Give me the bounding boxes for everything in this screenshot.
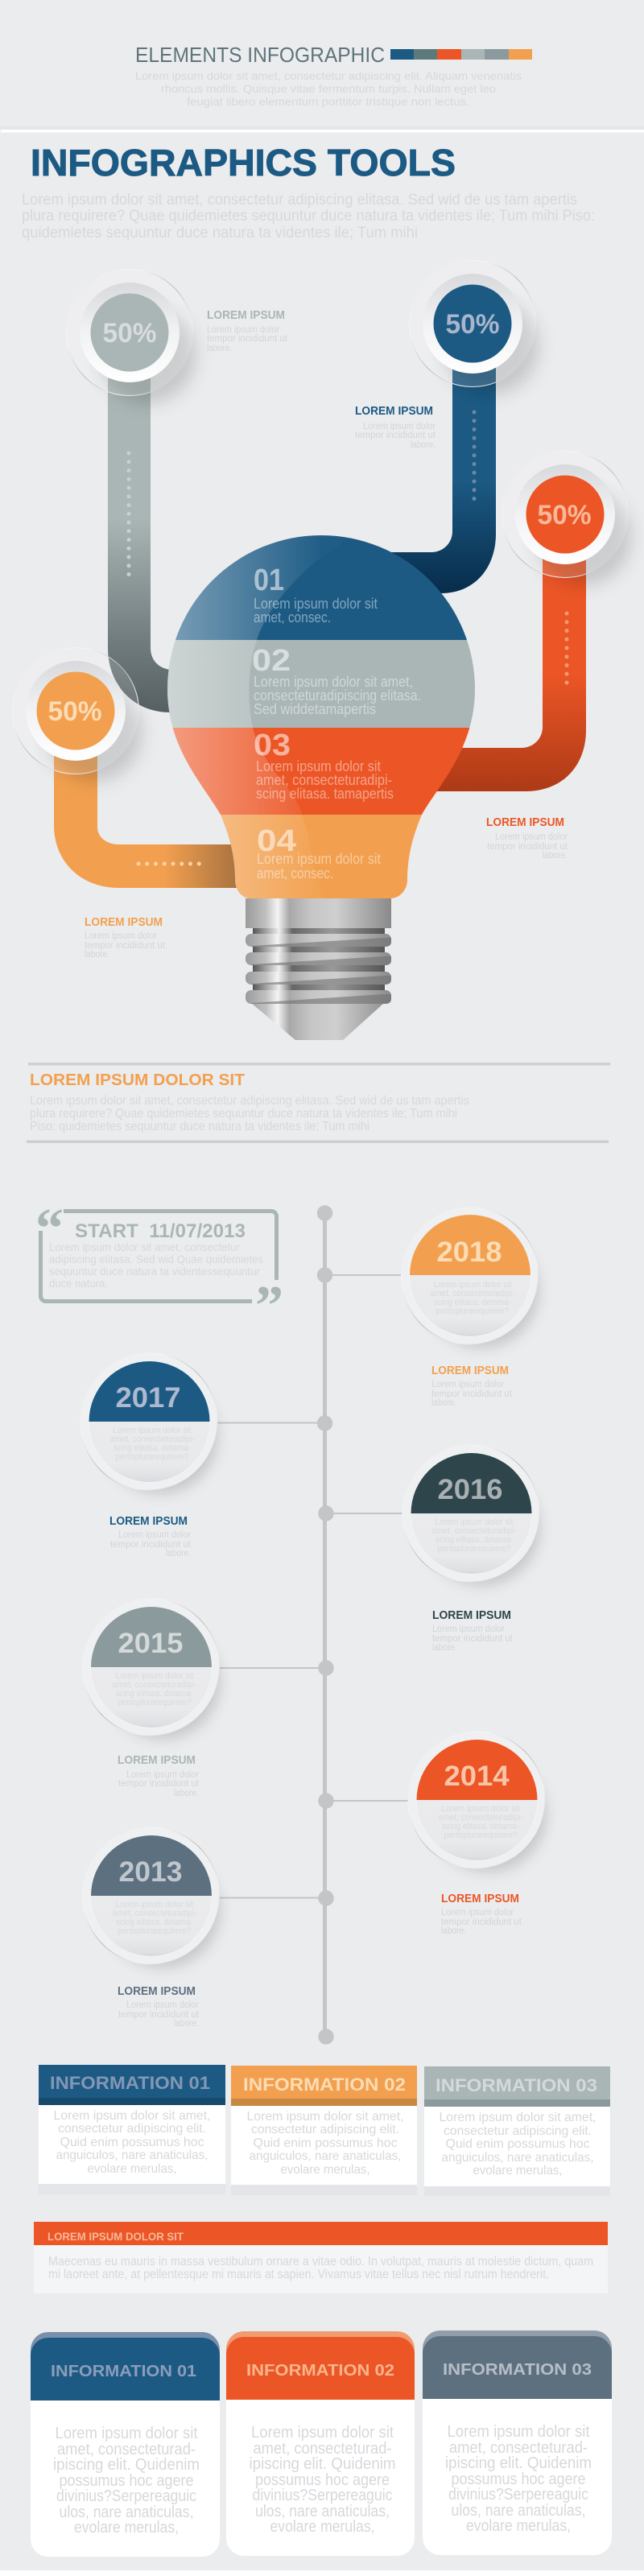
year circle 2013: 2013 (119, 1856, 182, 1888)
bottom card 01 (31, 2332, 220, 2557)
header divider (0, 126, 644, 132)
bottom card 02 (226, 2331, 415, 2556)
info box 01: Quid enim possumus hoc (60, 2136, 204, 2149)
info box 01: anguiculos, nare anaticulas, (56, 2149, 208, 2162)
label: blue (355, 405, 436, 450)
info box 01: consectetur adipiscing elit. (58, 2122, 206, 2136)
label 2013 (118, 1985, 200, 2029)
bottom card 03: evolare merulas, (466, 2517, 571, 2535)
bottom card 03: INFORMATION 03 (443, 2361, 592, 2379)
start description: Lorem ipsum dolor sit amet, consectetur (49, 1241, 240, 1253)
year circle 2013 (82, 1827, 221, 1968)
badge: yellow 50%: 50% (48, 696, 101, 727)
info box 01: evolare merulas, (87, 2162, 177, 2176)
year circle 2015: 2015 (118, 1628, 184, 1659)
quote frame (40, 1211, 277, 1301)
summary paragraph: Lorem ipsum dolor sit amet, consectetur adipiscing elitasa. Sed wid de us tam apertis (30, 1094, 469, 1108)
badge: orange 50% (502, 451, 631, 585)
year circle 2016: pertisplurarequirere? (438, 1544, 510, 1554)
label: grey: tempor incididunt ut (207, 334, 288, 344)
year circle 2015: amet, consecteturadipi- (113, 1680, 197, 1690)
badge: grey 50%: 50% (103, 318, 156, 349)
section 02 text: 02 (252, 644, 291, 678)
info box 02: evolare merulas, (280, 2163, 370, 2177)
year circle 2018: amet, consecteturadipi- (430, 1289, 515, 1298)
colour swatch bar (390, 49, 532, 60)
label 2014: labore. (441, 1926, 466, 1936)
year circle 2018: scing elitasa. detama- (434, 1298, 511, 1307)
year circle 2014: 2014 (444, 1761, 510, 1792)
header title: ELEMENTS INFOGRAPHIC (135, 43, 385, 67)
section 04 text: 04 (257, 824, 296, 858)
bottom card 01: INFORMATION 01 (51, 2363, 196, 2380)
section 01 text (254, 564, 378, 625)
intro paragraph: quidemietes sequuntur duce natura ta videntes ile; Tum mihi (22, 225, 418, 242)
year circle 2017: 2017 (116, 1382, 180, 1414)
section 03 text: amet, consecteturadipi- (256, 772, 392, 788)
label 2015: LOREM IPSUM (118, 1754, 196, 1767)
year circle 2014: Lorem ipsum dolor sit (441, 1804, 520, 1814)
intro paragraph: plura requirere? Quae quidemietes sequuntur duce natura ta videntes ile; Tum mihi Piso: (22, 208, 595, 225)
label: yellow: LOREM IPSUM (85, 916, 163, 929)
label: orange: Lorem ipsum dolor (495, 832, 568, 842)
badge: orange 50%: 50% (538, 500, 591, 530)
bottom card 03: possumus hoc agere (451, 2471, 586, 2488)
year circle 2017: Lorem ipsum dolor sit (113, 1426, 192, 1435)
year circle 2013: scing elitasa. detama- (116, 1918, 193, 1927)
year circle 2015: scing elitasa. detama- (116, 1689, 193, 1699)
info box 02: Lorem ipsum dolor sit amet, (246, 2110, 404, 2124)
label 2015 (118, 1754, 200, 1798)
badge: blue 50%: 50% (446, 309, 499, 340)
year circle 2017: amet, consecteturadipi- (109, 1435, 195, 1444)
info box 03: anguiculos, nare anaticulas, (441, 2151, 594, 2165)
info box 01: INFORMATION 01 (50, 2073, 210, 2093)
bottom card 02: INFORMATION 02 (246, 2362, 394, 2380)
section 03 text: Lorem ipsum dolor sit (256, 758, 381, 774)
label 2016: labore. (432, 1643, 457, 1653)
year circle 2016: Lorem ipsum dolor sit (435, 1517, 514, 1527)
main title: INFOGRAPHICS TOOLS (31, 142, 456, 184)
section 03 text: 03 (254, 729, 291, 762)
label: orange: LOREM IPSUM (486, 816, 564, 829)
info box 03: Quid enim possumus hoc (446, 2137, 589, 2151)
label 2018: labore. (431, 1398, 456, 1408)
section 02 text: consecteturadipiscing elitasa. (254, 687, 421, 704)
bottom card 01: possumus hoc agere (60, 2472, 193, 2490)
bottom card 02: amet, consecteturad- (253, 2440, 391, 2458)
label 2014: LOREM IPSUM (441, 1893, 519, 1905)
info box 03: INFORMATION 03 (436, 2075, 597, 2095)
start date heading: START 11/07/2013 (75, 1220, 246, 1242)
orange banner panel (34, 2222, 608, 2293)
bottom card 02: Lorem ipsum dolor sit (251, 2424, 394, 2442)
badge: yellow 50% (13, 647, 142, 782)
info box 02: anguiculos, nare anaticulas, (250, 2149, 401, 2163)
tube: orange (419, 555, 586, 791)
section 03 text: scing elitasa. tamapertis (256, 786, 394, 802)
info box 01 (39, 2065, 225, 2194)
label 2013: LOREM IPSUM (118, 1985, 196, 1998)
label 2016: Lorem ipsum dolor (432, 1624, 505, 1634)
start description: sequuntur duce natura ta videntessequuntur (49, 1265, 260, 1278)
bottom card 03 (423, 2330, 612, 2555)
light bulb diagram (13, 261, 631, 1040)
tube: yellow (54, 753, 250, 888)
summary paragraph (30, 1094, 469, 1133)
year circle 2015: pertisplurarequirere? (118, 1698, 192, 1707)
label 2017: tempor incididunt ut (110, 1540, 192, 1550)
label 2017: Lorem ipsum dolor (118, 1530, 191, 1540)
summary paragraph: plura requirere? Quae quidemietes sequuntur duce natura ta videntes ile; Tum mihi (30, 1107, 457, 1121)
header description: rhoncus mollis. Quisque vitae fermentum turpis. Nullam eget leo (161, 82, 496, 95)
section 02 text (252, 644, 421, 717)
year circle 2013: amet, consecteturadipi- (113, 1909, 197, 1918)
label 2013: tempor incididunt ut (118, 2010, 200, 2020)
label: blue: tempor incididunt ut (355, 431, 436, 440)
bottom card 02: ipiscing elit. Quidenim (250, 2455, 396, 2473)
section 04 text: Lorem ipsum dolor sit (257, 851, 381, 867)
year circle 2014: amet, consecteturadipi- (438, 1813, 523, 1823)
info box 02 (231, 2066, 417, 2195)
bottom card 01: evolare merulas, (74, 2519, 179, 2537)
year circle 2016: amet, consecteturadipi- (431, 1526, 517, 1536)
year circle 2013: Lorem ipsum dolor sit (116, 1900, 193, 1909)
year circle 2015: Lorem ipsum dolor sit (116, 1671, 193, 1681)
timeline spine and nodes (216, 1205, 416, 2045)
info box 03: evolare merulas, (473, 2164, 562, 2178)
start description: adipiscing elitasa. Sed wid Quae quidemietes (49, 1253, 263, 1265)
year circle 2017: pertisplurarequirere? (116, 1452, 188, 1462)
label: yellow: labore. (85, 950, 109, 960)
label 2014 (441, 1893, 522, 1936)
info box 02: consectetur adipiscing elit. (251, 2123, 399, 2136)
year circle 2016 (402, 1445, 540, 1586)
header description: feugiat libero elementum porttitor tristique non lectus. (187, 95, 469, 108)
label 2015: labore. (174, 1789, 199, 1798)
start description: duce natura. (49, 1277, 108, 1290)
label 2014: Lorem ipsum dolor (441, 1908, 514, 1918)
label: grey: Lorem ipsum dolor (207, 325, 279, 335)
tube: grey (108, 378, 171, 712)
year circle 2017: scing elitasa. detama- (114, 1443, 191, 1453)
section 02 text: Sed widdetamapertis (254, 701, 376, 717)
badge: blue 50% (409, 261, 539, 394)
year circle 2017 (80, 1353, 218, 1494)
label 2017: LOREM IPSUM (109, 1515, 188, 1528)
orange banner panel: LOREM IPSUM DOLOR SIT (47, 2230, 184, 2243)
bottom card 02: divinius?Serpereaguic (253, 2487, 393, 2504)
label 2015: tempor incididunt ut (118, 1779, 200, 1789)
section 03 text (254, 729, 394, 802)
year circle 2016: 2016 (438, 1474, 502, 1505)
label 2013: Lorem ipsum dolor (126, 2000, 199, 2010)
bottom card 02: evolare merulas, (270, 2518, 375, 2536)
year circle 2018: pertisplurarequirere? (436, 1307, 509, 1316)
badge: grey 50% (66, 269, 196, 403)
label 2013: labore. (174, 2019, 199, 2029)
label: blue: Lorem ipsum dolor (363, 422, 436, 431)
section 02 text: Lorem ipsum dolor sit amet, (254, 674, 413, 690)
header description (135, 69, 522, 108)
bottom card 02: possumus hoc agere (255, 2471, 390, 2489)
year circle 2018: Lorem ipsum dolor sit (433, 1280, 512, 1290)
bottom card 03: ipiscing elit. Quidenim (445, 2454, 592, 2472)
intro paragraph: Lorem ipsum dolor sit amet, consectetur adipiscing elitasa. Sed wid de us tam apertis (22, 192, 577, 208)
label 2016: LOREM IPSUM (432, 1609, 511, 1622)
bottom card 01: ipiscing elit. Quidenim (53, 2456, 200, 2474)
label: blue: LOREM IPSUM (355, 405, 433, 418)
label: blue: labore. (411, 440, 436, 450)
tube: blue (378, 366, 496, 593)
label: grey: LOREM IPSUM (207, 309, 285, 322)
label 2018 (431, 1364, 513, 1408)
section 01 text: amet, consec. (254, 609, 331, 625)
year circle 2013: pertisplurarequirere? (118, 1926, 192, 1936)
label 2018: Lorem ipsum dolor (431, 1380, 504, 1389)
label 2017 (109, 1515, 192, 1558)
year circle 2014: pertisplurarequirere? (444, 1831, 517, 1840)
header block (135, 43, 532, 108)
year circle 2014: scing elitasa. detama- (442, 1822, 519, 1831)
section 01 text: 01 (254, 564, 284, 597)
label: orange: tempor incididunt ut (487, 842, 568, 852)
label 2014: tempor incididunt ut (441, 1918, 522, 1927)
bulb screw base (246, 898, 391, 1040)
summary paragraph: Piso: quidemietes sequuntur duce natura ta videntes ile; Tum mihi (30, 1120, 369, 1133)
bulb glass sections (161, 531, 483, 900)
opening quote mark: “ (35, 1198, 64, 1260)
bottom card 03: Lorem ipsum dolor sit (448, 2423, 590, 2441)
bottom white margin (0, 2570, 644, 2576)
info box 01: Lorem ipsum dolor sit amet, (53, 2109, 211, 2123)
closing quote mark: ” (255, 1275, 283, 1337)
bottom card 01: divinius?Serpereaguic (56, 2487, 196, 2505)
info box 03: Lorem ipsum dolor sit amet, (440, 2111, 596, 2124)
summary text block (27, 1063, 610, 1143)
orange banner panel: Maecenas eu mauris in massa vestibulum ornare a vitae odio. In volutpat, mauris at molestie dictum, quam (48, 2255, 593, 2268)
header description: Lorem ipsum dolor sit amet, consectetur adipiscing elit. Aliquam venenatis (135, 69, 522, 82)
label: yellow (85, 916, 166, 960)
start date quote box (35, 1198, 283, 1337)
label: yellow: Lorem ipsum dolor (85, 931, 157, 941)
bottom card 01: ulos, nare anaticulas, (60, 2504, 193, 2521)
year circle 2016: scing elitasa. detama- (436, 1535, 513, 1545)
year circle 2015 (82, 1599, 221, 1740)
bottom card 01: amet, consecteturad- (57, 2441, 196, 2458)
info box 03 (424, 2066, 610, 2196)
orange banner panel: mi laoreet ante, at pellentesque mi mauris at sapien. Vivamus vitae tellus nec nisl rutrum hendrerit. (48, 2268, 549, 2281)
label 2018: LOREM IPSUM (431, 1364, 509, 1377)
summary heading: LOREM IPSUM DOLOR SIT (30, 1071, 245, 1089)
section 04 text (257, 824, 381, 881)
year circle 2018: 2018 (436, 1236, 502, 1268)
label: grey (207, 309, 288, 353)
bottom card 03: divinius?Serpereaguic (448, 2486, 588, 2504)
label 2016: tempor incididunt ut (432, 1634, 514, 1644)
section 04 text: amet, consec. (257, 865, 333, 881)
label 2016 (432, 1609, 514, 1653)
label 2015: Lorem ipsum dolor (126, 1770, 199, 1780)
label 2018: tempor incididunt ut (431, 1389, 513, 1399)
info box 02: Quid enim possumus hoc (253, 2136, 398, 2150)
label: yellow: tempor incididunt ut (85, 941, 166, 951)
bottom card 02: ulos, nare anaticulas, (255, 2503, 390, 2520)
bottom card 03: amet, consecteturad- (449, 2439, 588, 2457)
year circle 2014 (408, 1732, 547, 1872)
label: orange (486, 816, 568, 861)
year circle 2018 (401, 1208, 539, 1348)
info box 03: consectetur adipiscing elit. (444, 2124, 592, 2138)
label: orange: labore. (543, 851, 568, 861)
bottom card 01: Lorem ipsum dolor sit (55, 2425, 198, 2442)
label 2017: labore. (166, 1549, 191, 1558)
label: grey: labore. (207, 344, 232, 353)
section 01 text: Lorem ipsum dolor sit (254, 596, 378, 612)
start description (49, 1241, 263, 1290)
intro paragraph (22, 192, 595, 242)
bottom card 03: ulos, nare anaticulas, (451, 2502, 586, 2520)
info box 02: INFORMATION 02 (243, 2074, 406, 2095)
